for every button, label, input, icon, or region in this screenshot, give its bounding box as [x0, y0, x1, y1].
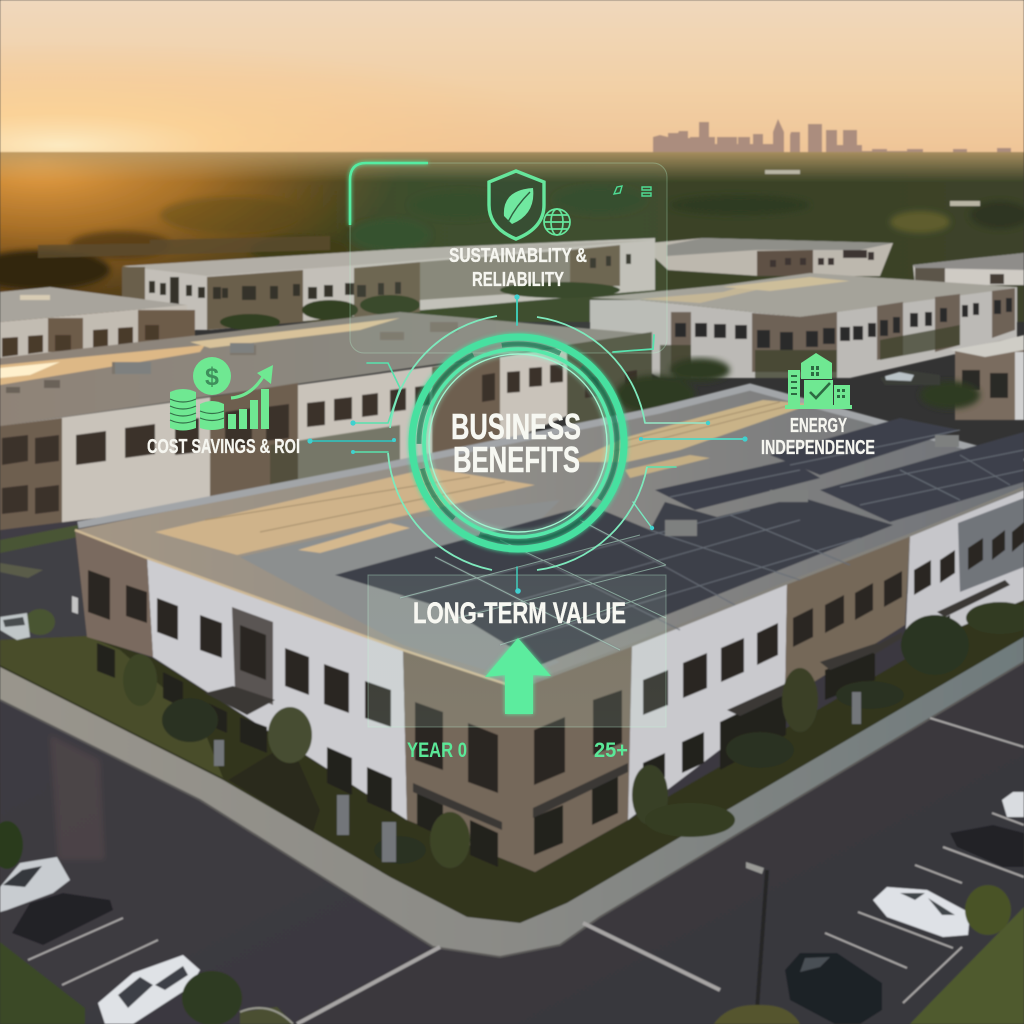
left wall: [147, 558, 407, 820]
timeline axis: [364, 725, 665, 729]
outer thin arcs: [388, 316, 647, 570]
metal screen section: [958, 498, 1024, 592]
front brown wall: [403, 645, 632, 872]
roof parapet edges: [75, 387, 1024, 688]
connector dots: [307, 294, 748, 594]
sidewalk: [0, 637, 1024, 957]
left parking and landscaping: [0, 525, 1024, 923]
ground and roads: [0, 480, 1024, 1024]
heading: sustainability and reliability: [449, 244, 587, 291]
dark solar panels: [335, 497, 893, 665]
parking lines and road markings: [28, 718, 1024, 1024]
right brown wall: [785, 535, 910, 700]
lower roof lighter surface: [240, 500, 560, 680]
label: energy independence: [761, 415, 875, 459]
building: center back: [122, 238, 655, 330]
label: energy independence: ENERGY: [790, 415, 847, 437]
right white wall far: [905, 490, 1024, 650]
tree line: [0, 152, 1024, 322]
distant building row: [38, 236, 1024, 285]
street lamp and foreground greenery: [0, 821, 1024, 1024]
EV chargers: [214, 692, 861, 862]
windows lower: [97, 615, 950, 867]
timeline labels: 25+: [594, 739, 628, 762]
building: far left: [0, 287, 195, 365]
trees and shrubs by building: [123, 602, 1024, 868]
light reflection on road: [50, 735, 105, 860]
city skyline: [653, 119, 1017, 157]
bottom translucent panel: [368, 575, 666, 727]
parked cars: [0, 792, 1024, 1024]
top translucent panel: [350, 163, 667, 353]
label: cost savings and roi: COST SAVINGS & ROI: [147, 436, 300, 458]
timeline labels: YEAR 0: [407, 739, 467, 762]
heading: business benefits: BUSINESS: [451, 406, 581, 447]
left brown wall: [75, 530, 153, 657]
central ring: [412, 337, 624, 549]
sunlit solar panels: [155, 400, 812, 555]
icon: energy independence building with check: [785, 353, 852, 409]
canopies: [205, 580, 1010, 830]
icon: cost savings coins and chart: $: [205, 363, 219, 391]
holographic HUD overlay: [147, 163, 875, 762]
solar panel grid lines: [400, 430, 1024, 650]
icon: shield with leaf: [489, 171, 544, 239]
building: left mid with roof panels: [0, 312, 652, 532]
sky: [0, 0, 1024, 156]
windows upper: [88, 522, 1024, 793]
panel grid glow on solar array: [400, 520, 666, 650]
curb shadow: [0, 662, 1024, 957]
right white wall: [628, 583, 787, 820]
icon: globe: [544, 209, 570, 235]
timeline labels: [407, 739, 628, 762]
arrow: upward growth: [485, 638, 551, 714]
roof units: [115, 343, 959, 536]
roof: [75, 385, 1024, 688]
label: energy independence: INDEPENDENCE: [761, 437, 875, 459]
trees behind main building: [615, 358, 980, 415]
heading: sustainability and reliability: SUSTAINABLITY &: [449, 244, 587, 267]
building: far right: [950, 335, 1024, 420]
small car and lot behind main building: [880, 370, 940, 385]
icon: cost savings coins and chart: [170, 357, 273, 430]
tall entry panel: [232, 607, 273, 705]
building: right mid: [590, 273, 1017, 378]
heading: sustainability and reliability: RELIABILITY: [472, 268, 564, 291]
heading: long-term value: LONG-TERM VALUE: [413, 597, 626, 630]
heading: business benefits: BENEFITS: [453, 439, 580, 480]
heading: business benefits: [451, 406, 581, 480]
connectors: [310, 297, 745, 591]
main building: [75, 343, 1024, 872]
